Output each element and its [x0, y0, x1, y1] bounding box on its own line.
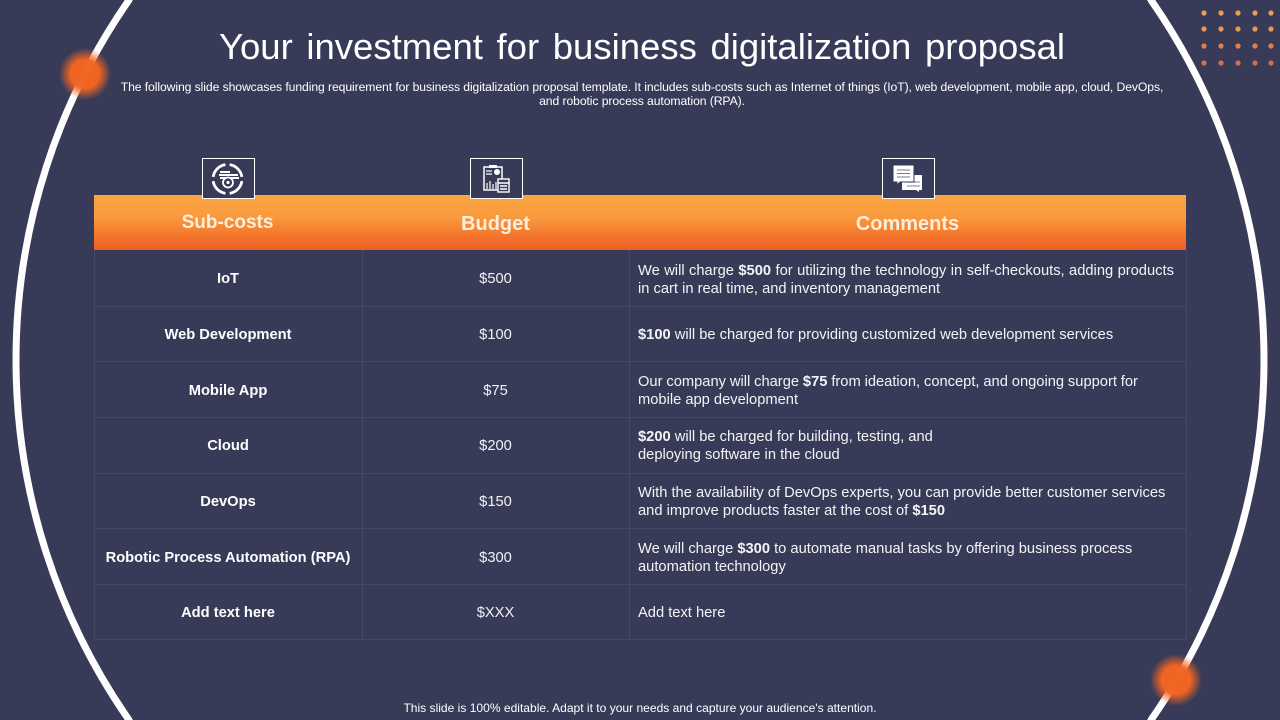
table body: $100	[479, 327, 512, 343]
icon: chat bubbles	[882, 158, 935, 199]
table body: $200 will be charged for building, testing, and	[638, 429, 933, 445]
table body: $XXX	[477, 605, 514, 621]
subtitle: The following slide showcases funding requirement for business digitalization proposal template. It includes sub-costs such as Internet of things (IoT), web development, mobile app, cloud, DevOps,	[121, 80, 1163, 94]
table body: and improve products faster at the cost of $150	[638, 503, 945, 519]
table body: With the availability of DevOps experts, you can provide better customer services	[638, 485, 1165, 501]
title: Your investment for business digitalization proposal	[219, 26, 1065, 67]
table body: $300	[479, 550, 512, 566]
row: Robotic Process Automation: Robotic Process Automation (RPA)	[106, 550, 350, 566]
row: Web Development: Web Development	[164, 327, 292, 343]
subtitle	[121, 80, 1163, 108]
footer note: This slide is 100% editable. Adapt it to your needs and capture your audience's attention.	[403, 701, 877, 715]
table body: automation technology	[638, 559, 786, 575]
table body: We will charge $300 to automate manual tasks by offering business process	[638, 541, 1132, 557]
table body: Add text here	[638, 605, 725, 621]
table body: $100 will be charged for providing customized web development services	[638, 327, 1113, 343]
table body: We will charge $500 for utilizing the technology in self-checkouts, adding products	[638, 263, 1174, 279]
row: Add text here: Add text here	[181, 605, 275, 621]
table body: $75	[483, 383, 508, 399]
icon: coins in ring	[202, 158, 255, 199]
table body: Our company will charge $75 from ideation, concept, and ongoing support for	[638, 374, 1138, 390]
row: IoT: IoT	[217, 271, 239, 287]
table body: in cart in real time, and inventory management	[638, 281, 940, 297]
table body: deploying software in the cloud	[638, 447, 840, 463]
row: DevOps: DevOps	[200, 494, 256, 510]
table body: $500	[479, 271, 512, 287]
icon: clipboard and calculator	[470, 158, 523, 199]
header: budget: Budget	[461, 213, 530, 235]
dot grid	[1201, 10, 1274, 66]
row: Mobile App: Mobile App	[189, 383, 267, 399]
table body: $150	[479, 494, 512, 510]
table body: mobile app development	[638, 392, 798, 408]
subtitle: and robotic process automation (RPA).	[539, 94, 745, 108]
table body: $200	[479, 438, 512, 454]
row: Cloud: Cloud	[207, 438, 249, 454]
header: comments: Comments	[856, 213, 959, 235]
header: sub-costs: Sub-costs	[182, 212, 273, 233]
table header band	[94, 195, 1186, 250]
